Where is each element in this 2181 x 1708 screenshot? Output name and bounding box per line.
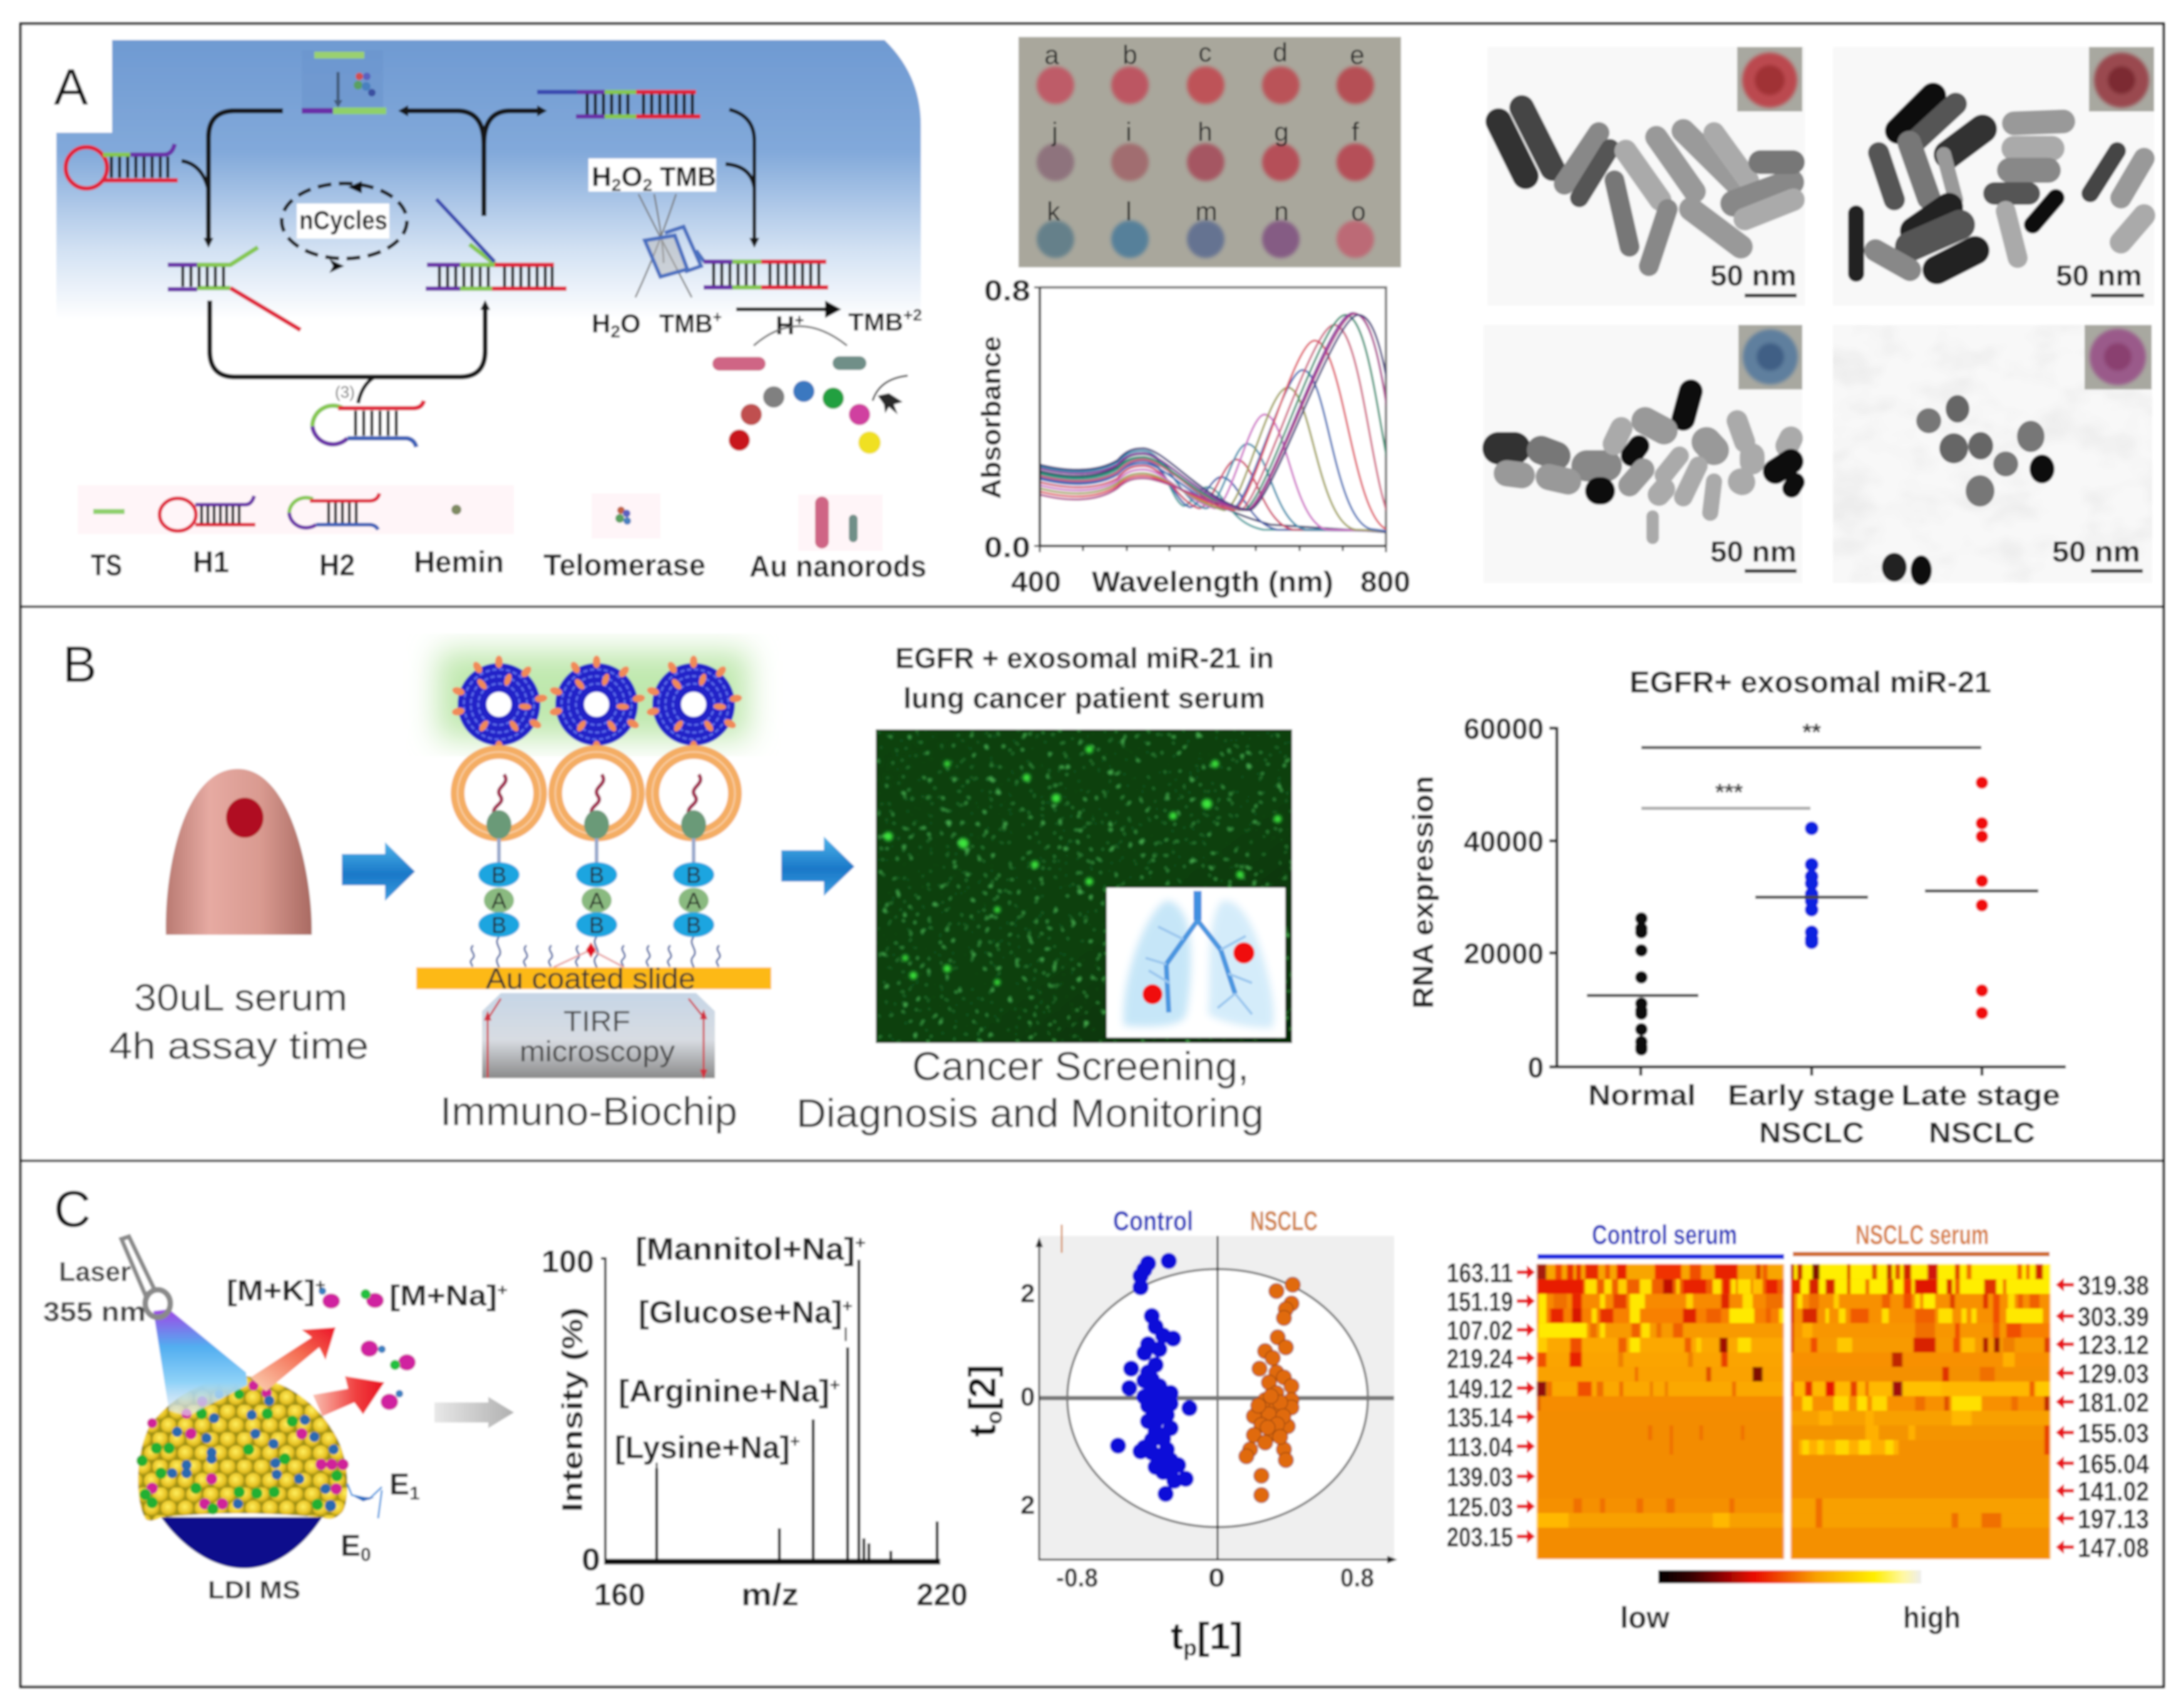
- TEM image 4: [1833, 325, 2152, 585]
- colorimetric plate photo: c: [1198, 38, 1212, 67]
- reaction products: H: [592, 309, 610, 338]
- left metabolite labels: [1447, 1258, 1513, 1553]
- reaction products: H: [776, 311, 794, 340]
- right metabolite labels: 181.02: [2078, 1387, 2149, 1418]
- TIRF microscope: microscopy: [520, 1035, 675, 1068]
- colorimetric plate photo: i: [1126, 117, 1132, 147]
- PCA score plot: [962, 1206, 1397, 1660]
- hairpin H1: [66, 144, 178, 188]
- panel A: telomerase detection: [21, 24, 2163, 607]
- spectrum peak labels: +: [855, 1233, 866, 1252]
- colorimetric plate photo: [1019, 37, 1401, 267]
- immuno-biochip schematic: B: [589, 912, 604, 938]
- spectrum peak labels: [Arginine+Na]: [618, 1374, 824, 1409]
- absorbance chart: Absorbance: [976, 336, 1007, 499]
- telomerase and TS primer: [302, 50, 386, 111]
- laser label: 355 nm: [43, 1297, 146, 1327]
- TEM image 2: [1833, 47, 2154, 306]
- absorbance chart: Wavelength (nm): [1092, 565, 1333, 598]
- left metabolite labels: 203.15: [1447, 1522, 1513, 1553]
- ion labels: [227, 1274, 508, 1312]
- left metabolite labels: 107.02: [1447, 1315, 1513, 1346]
- colorimetric plate photo: d: [1273, 38, 1288, 67]
- reaction products: +: [794, 311, 804, 329]
- axis labels: Early stage: [1728, 1079, 1895, 1111]
- immuno-biochip schematic: B: [686, 912, 701, 938]
- immuno-biochip schematic: A: [491, 888, 506, 913]
- right metabolite labels: 155.03: [2078, 1418, 2149, 1449]
- colorimetric plate photo: l: [1126, 197, 1132, 226]
- right metabolite labels: 165.04: [2078, 1449, 2149, 1479]
- colorimetric plate photo: j: [1050, 117, 1058, 147]
- duplex with tails, left: [168, 247, 300, 330]
- spectrum peak labels: [Mannitol+Na]: [635, 1232, 843, 1267]
- heatmap lower rows: [1537, 1411, 2050, 1528]
- right metabolite labels: 197.13: [2078, 1504, 2149, 1535]
- legend icon: TS: [93, 509, 125, 514]
- PCA axis labels: 0.8: [1340, 1563, 1374, 1592]
- heatmap row 6: [1537, 1338, 2050, 1352]
- TEM image 1: [1487, 47, 1805, 306]
- right metabolite labels: 303.39: [2078, 1302, 2149, 1332]
- colour dots arc: [729, 381, 881, 454]
- left metabolite labels: 139.03: [1447, 1462, 1513, 1493]
- colour scale: [1620, 1570, 1961, 1635]
- significance bars: [1641, 719, 1981, 808]
- spectrum axis labels: [541, 1244, 968, 1612]
- hairpin H2 with arrow: (3): [335, 383, 355, 401]
- heading C: C: [54, 1181, 91, 1238]
- immuno-biochip schematic: B: [491, 912, 506, 938]
- heatmap row 10: [1537, 1396, 2050, 1411]
- colorimetric plate photo: b: [1122, 40, 1137, 69]
- PCA axis labels: 2: [1020, 1490, 1035, 1520]
- significance bars: ***: [1715, 779, 1743, 806]
- PCA axis labels: t: [1171, 1615, 1183, 1657]
- legend icon: hemin: [451, 505, 461, 515]
- absorbance chart: [976, 274, 1410, 598]
- PCA axis labels: -0.8: [1056, 1563, 1098, 1592]
- colorimetric plate photo: g: [1274, 117, 1289, 147]
- immuno-biochip schematic: [416, 651, 771, 1134]
- spectrum peak labels: [Lysine+Na]: [615, 1430, 792, 1465]
- heatmap row 1: [1537, 1264, 2050, 1279]
- inset: purple spot: [2085, 325, 2152, 389]
- red desorption arrow: [250, 1327, 336, 1391]
- screening caption: [796, 1044, 1264, 1136]
- TIRF microscope: [482, 993, 715, 1079]
- PCA axis labels: t: [962, 1424, 1003, 1437]
- right metabolite labels: 319.38: [2078, 1270, 2149, 1301]
- colorimetric plate photo: a: [1044, 40, 1059, 69]
- left metabolite labels: 113.04: [1447, 1432, 1513, 1463]
- scale bar 50 nm: 50 nm: [2056, 259, 2142, 292]
- colour scale: low: [1620, 1602, 1670, 1635]
- legend labels: H2: [319, 549, 355, 582]
- panel C: metabolic fingerprinting: [21, 1161, 2163, 1687]
- PCA axis labels: 0: [1208, 1563, 1225, 1592]
- right metabolite labels: 141.02: [2078, 1476, 2149, 1507]
- G-quadruplex catalysis: [588, 158, 716, 297]
- spectrum axis labels: m/z: [741, 1577, 799, 1612]
- reaction products: TMB: [659, 309, 716, 338]
- fluorescence heading: [895, 642, 1274, 714]
- legend icon: Au nanorods: [822, 503, 853, 542]
- axis labels: 60000: [1464, 713, 1544, 745]
- serum text: 30uL serum: [134, 977, 347, 1019]
- spectrum axis labels: 160: [594, 1577, 645, 1612]
- nCycles loop: [282, 181, 407, 273]
- ion molecules: [319, 1287, 416, 1410]
- ion labels: +: [497, 1280, 508, 1299]
- left metabolite labels: 163.11: [1447, 1258, 1513, 1289]
- gold slide: [416, 962, 771, 995]
- legend icon: H2: [289, 493, 379, 530]
- axis labels: [1407, 713, 2060, 1149]
- scatter chart: [1407, 666, 2066, 1149]
- gray process arrow: [434, 1397, 514, 1428]
- left metabolite labels: 149.12: [1447, 1374, 1513, 1404]
- reaction products: +2: [903, 306, 922, 324]
- colorimetric plate photo: h: [1198, 117, 1213, 147]
- scale bar 50 nm: 50 nm: [1710, 259, 1797, 292]
- colorimetric plate photo: o: [1351, 197, 1366, 226]
- colour scale: high: [1903, 1602, 1961, 1635]
- spectrum axis labels: 0: [582, 1542, 600, 1577]
- spectrum peak labels: +: [843, 1296, 853, 1315]
- heatmap row 2: [1537, 1279, 2050, 1294]
- ion labels: [M+K]: [227, 1274, 307, 1307]
- ion labels: [M+Na]: [389, 1279, 486, 1312]
- spectrum axis labels: 100: [541, 1244, 594, 1279]
- right metabolite labels: [2078, 1270, 2149, 1563]
- PCA axis labels: [962, 1278, 1374, 1660]
- absorbance chart: 800: [1360, 565, 1410, 598]
- left metabolite labels: 135.14: [1447, 1402, 1513, 1433]
- immuno-biochip schematic: B: [491, 862, 506, 888]
- immuno-biochip schematic: A: [589, 888, 604, 913]
- G-quadruplex catalysis: TMB: [660, 162, 716, 192]
- colorimetric plate photo: k: [1047, 197, 1060, 226]
- PCA axis labels: o: [981, 1411, 1007, 1424]
- serum text: [109, 977, 369, 1067]
- heatmap row 5: [1537, 1323, 2050, 1338]
- heatmap group headers: Control serum: [1592, 1220, 1737, 1250]
- cycle arrows: [182, 72, 759, 403]
- immuno-biochip schematic: B: [589, 862, 604, 888]
- inset: dark red spot: [2089, 47, 2154, 111]
- PCA axis labels: [1]: [1197, 1615, 1243, 1657]
- PCA axis labels: [2]: [962, 1365, 1003, 1411]
- fluorescence heading: lung cancer patient serum: [903, 682, 1265, 714]
- serum text: 4h assay time: [109, 1025, 369, 1067]
- PCA axis labels: 0: [1020, 1382, 1035, 1411]
- absorbance chart: 400: [1011, 565, 1061, 598]
- axis labels: NSCLC: [1929, 1116, 2035, 1149]
- metabolite heatmap: [1447, 1220, 2149, 1635]
- colorimetric plate photo: e: [1350, 40, 1365, 69]
- right metabolite labels: 129.03: [2078, 1359, 2149, 1389]
- duplex right with quadruplex: [704, 262, 828, 287]
- nCycles loop: nCycles: [299, 205, 387, 235]
- energy levels: 0: [361, 1545, 371, 1565]
- immuno-biochip schematic: Immuno-Biochip: [440, 1089, 737, 1134]
- hairpin H2 with arrow: [312, 383, 424, 447]
- red desorption arrow: [313, 1376, 384, 1416]
- G-quadruplex catalysis: 2: [612, 175, 621, 195]
- mass spectrum: [541, 1232, 968, 1612]
- heatmap row 9: [1537, 1382, 2050, 1396]
- late stage points: [1925, 776, 2038, 1019]
- scale bar 50 nm: 50 nm: [1710, 535, 1797, 568]
- laser tube: [121, 1237, 170, 1317]
- finger with blood drop: [166, 769, 312, 935]
- axis labels: Late stage: [1901, 1079, 2060, 1111]
- immuno-biochip schematic: A: [686, 888, 701, 913]
- energy levels: [341, 1468, 420, 1565]
- heatmap group headers: [1537, 1220, 2050, 1257]
- chart title: EGFR+ exosomal miR-21: [1629, 666, 1991, 699]
- normal group points: [1587, 912, 1698, 1056]
- left metabolite labels: 151.19: [1447, 1287, 1513, 1317]
- inset: blue spot: [1738, 325, 1802, 389]
- PCA group labels: NSCLC: [1250, 1206, 1318, 1237]
- reaction products: 2: [610, 322, 620, 341]
- screening caption: Cancer Screening,: [912, 1044, 1249, 1089]
- right metabolite labels: 123.12: [2078, 1330, 2149, 1361]
- legend icon: H1: [160, 496, 255, 531]
- heatmap row 3: [1537, 1294, 2050, 1309]
- legend labels: TS: [91, 549, 122, 582]
- heatmap row 8: [1537, 1367, 2050, 1382]
- TIRF microscope: TIRF: [563, 1005, 630, 1037]
- spectrum axis labels: Intensity (%): [556, 1307, 588, 1512]
- G-quadruplex catalysis: 2: [643, 175, 652, 195]
- PCA axis labels: 2: [1020, 1278, 1035, 1308]
- laser beam: [153, 1309, 247, 1416]
- left red arrows: [1517, 1265, 1535, 1543]
- right red arrows: [2056, 1278, 2074, 1554]
- gold nanorods reaction: [719, 363, 860, 364]
- scale bar 50 nm: 50 nm: [2052, 535, 2140, 568]
- fluorescence micrograph: [876, 729, 1292, 1043]
- laser label: Laser: [59, 1257, 131, 1287]
- screening caption: Diagnosis and Monitoring: [796, 1091, 1264, 1136]
- legend row: [78, 485, 926, 584]
- energy levels: E: [341, 1530, 361, 1563]
- reaction products: [592, 301, 922, 346]
- TEM image 3: [1484, 325, 1802, 583]
- PCA group labels: [1113, 1206, 1318, 1237]
- heatmap row 4: [1537, 1309, 2050, 1323]
- inset: red spot: [1737, 47, 1802, 111]
- arrow: [781, 836, 854, 896]
- duplex with tails, middle: [426, 199, 567, 289]
- arrow: [342, 842, 415, 901]
- spectrum peak labels: [615, 1232, 866, 1465]
- legend icon: telomerase: [615, 507, 631, 525]
- heading A: A: [54, 59, 88, 116]
- spectrum peak labels: +: [829, 1375, 840, 1394]
- lung inset: [1107, 888, 1285, 1037]
- NSCLC points: [1239, 1277, 1300, 1503]
- reaction products: TMB: [848, 309, 903, 336]
- legend labels: Hemin: [414, 546, 504, 579]
- left metabolite labels: 125.03: [1447, 1492, 1513, 1523]
- gold slide: Au coated slide: [486, 962, 695, 995]
- nanoparticle sphere: [136, 1376, 349, 1568]
- colorimetric plate photo: f: [1352, 117, 1359, 147]
- axis labels: 40000: [1464, 825, 1544, 858]
- chart axes: [1549, 727, 2066, 1076]
- fluorescence heading: EGFR + exosomal miR-21 in: [895, 642, 1274, 674]
- absorbance chart: 0.8: [984, 274, 1030, 307]
- legend labels: Au nanorods: [749, 550, 926, 584]
- energy levels: 1: [409, 1483, 420, 1504]
- control points: [1110, 1253, 1198, 1502]
- reaction products: O: [620, 309, 641, 338]
- ion labels: +: [315, 1275, 326, 1294]
- panel B: exosomal miR-21 biochip: [21, 607, 2163, 1161]
- legend labels: H1: [193, 546, 229, 579]
- PCA group labels: Control: [1113, 1206, 1193, 1237]
- axis labels: 20000: [1464, 937, 1544, 970]
- colorimetric plate photo: n: [1274, 197, 1289, 226]
- left metabolite labels: 219.24: [1447, 1344, 1513, 1374]
- colorimetric plate photo: m: [1196, 197, 1217, 226]
- heatmap row 7: [1537, 1352, 2050, 1367]
- heatmap group headers: NSCLC serum: [1855, 1220, 1989, 1250]
- immuno-biochip schematic: B: [686, 862, 701, 888]
- spectrum peak labels: +: [790, 1431, 800, 1451]
- energy levels: E: [389, 1468, 409, 1501]
- heatmap cells: [1537, 1263, 2050, 1559]
- PCA axis labels: p: [1183, 1635, 1197, 1660]
- right metabolite labels: 147.08: [2078, 1533, 2149, 1563]
- spectrum axis labels: 220: [916, 1577, 968, 1612]
- significance bars: **: [1802, 719, 1821, 746]
- heading B: B: [63, 636, 97, 693]
- G-quadruplex catalysis: H: [592, 162, 612, 192]
- panel A blue backdrop: [56, 40, 921, 319]
- axis labels: Normal: [1588, 1079, 1696, 1111]
- icon: observer: [873, 376, 908, 414]
- early stage points: [1755, 821, 1868, 949]
- legend labels: [91, 546, 926, 584]
- LDI MS label: LDI MS: [208, 1577, 300, 1604]
- axis labels: RNA expression: [1407, 776, 1439, 1009]
- absorbance chart: 0.0: [984, 531, 1030, 563]
- spectrum peak labels: [Glucose+Na]: [639, 1295, 841, 1330]
- axis labels: NSCLC: [1759, 1116, 1864, 1149]
- legend labels: Telomerase: [543, 549, 706, 582]
- duplex top right: [537, 92, 700, 116]
- G-quadruplex catalysis: O: [621, 162, 643, 192]
- reaction products: +: [713, 307, 722, 326]
- axis labels: 0: [1527, 1051, 1544, 1084]
- laser label: [43, 1257, 146, 1327]
